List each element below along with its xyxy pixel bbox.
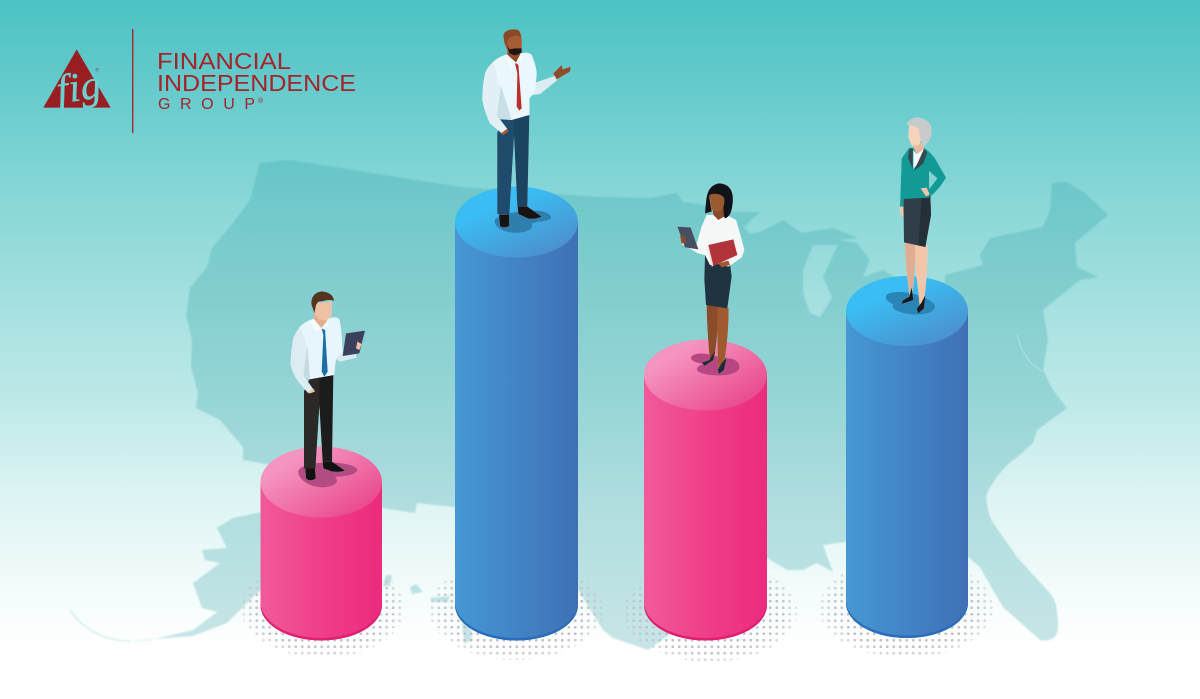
logo: company name: GROUP bbox=[158, 96, 255, 113]
dot shadow: cylinder 2 bbox=[430, 576, 602, 660]
logo: company name: INDEPENDENCE bbox=[157, 70, 356, 96]
logo: divider line bbox=[132, 29, 133, 133]
dot shadow: cylinder 1 bbox=[242, 576, 405, 654]
logo: company name bbox=[157, 48, 356, 113]
logo: triangle mark bbox=[43, 49, 111, 112]
logo: company name: ® bbox=[258, 97, 264, 105]
map: Chesapeake bay bbox=[1017, 335, 1042, 372]
map: Hawaii bbox=[383, 575, 472, 644]
logo: triangle mark: ® bbox=[95, 66, 99, 72]
cylinder 3: pink bbox=[644, 340, 767, 640]
map of the United States bbox=[70, 160, 1108, 650]
map: contiguous states bbox=[186, 160, 1108, 650]
logo: triangle mark: fig bbox=[54, 61, 104, 112]
cylinder 2: blue bbox=[455, 186, 578, 640]
map: Aleutian chain bbox=[70, 610, 130, 641]
cylinder 4: blue bbox=[846, 276, 968, 638]
person 3: woman with tablet and red folder bbox=[677, 183, 744, 375]
dot shadow: cylinder 3 bbox=[626, 576, 797, 661]
map: Alaska bbox=[128, 512, 268, 641]
dot shadow: cylinder 4 bbox=[820, 574, 993, 654]
person 4: woman in teal jacket bbox=[886, 118, 946, 314]
logo: company name: FINANCIAL bbox=[157, 48, 291, 74]
person 1: man with tablet bbox=[291, 292, 365, 487]
person 2: man with beard and red tie bbox=[482, 29, 571, 233]
logo bbox=[43, 29, 356, 133]
cylinder 1: pink bbox=[260, 446, 382, 640]
